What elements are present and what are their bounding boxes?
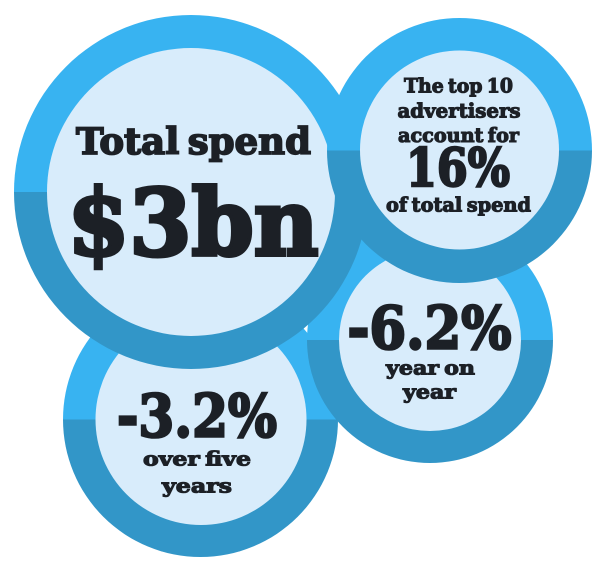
label: year on year xyxy=(385,356,475,404)
stat: -6.2%: -6.2% xyxy=(348,294,512,362)
label: over five years: over five xyxy=(143,446,251,470)
label: the top 10 advertisers account for: account for xyxy=(398,123,519,147)
label: the top 10 advertisers account for: The top 10 xyxy=(404,74,513,98)
circle: total spend xyxy=(14,15,368,369)
stat: $3bn: $3bn xyxy=(68,169,318,277)
circle: top 10 advertisers xyxy=(327,18,592,283)
label: year on year: year xyxy=(402,380,457,404)
label: the top 10 advertisers account for: advertisers xyxy=(398,98,520,122)
label: year on year: year on xyxy=(385,356,475,380)
circle: over five years xyxy=(63,282,338,557)
label: over five years: years xyxy=(161,474,232,498)
heading: total spend: Total spend xyxy=(76,121,311,163)
circle: year on year xyxy=(307,217,553,463)
label: of total spend: of total spend xyxy=(386,192,531,216)
stat: 16%: 16% xyxy=(406,138,510,199)
label: the top 10 advertisers account for xyxy=(398,74,520,147)
label: over five years xyxy=(143,446,251,498)
stat: -3.2%: -3.2% xyxy=(117,382,277,450)
